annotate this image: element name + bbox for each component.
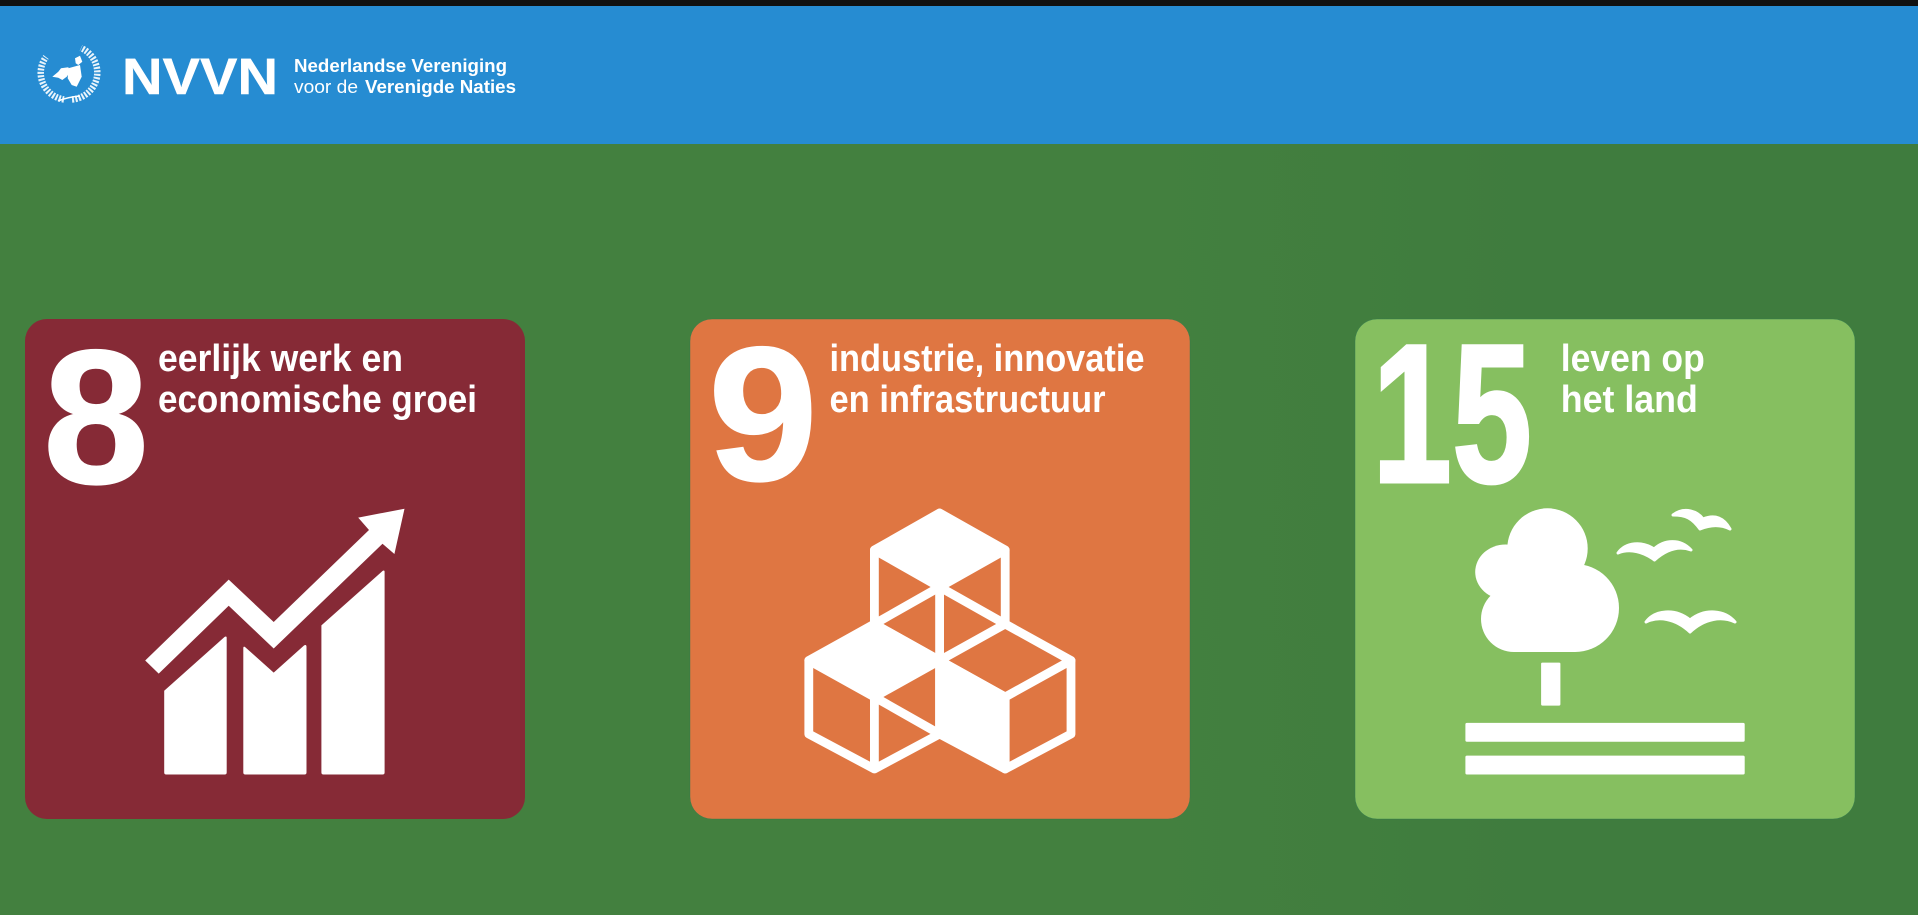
logo tagline: Nederlandse Vereniging [294, 55, 507, 76]
logo tagline [294, 55, 516, 97]
goal title 15: het land [1561, 379, 1698, 421]
icon: stacked cubes [809, 513, 1071, 769]
goal title 15: leven op [1561, 338, 1705, 380]
logo tagline: Verenigde Naties [365, 76, 516, 97]
goal title 8: economische groei [158, 379, 477, 421]
goal number 8: 8 [43, 311, 149, 524]
goal title 9: industrie, innovatie [830, 338, 1144, 380]
goal title 15 [1561, 338, 1705, 421]
goal title 9 [830, 338, 1144, 421]
header band [0, 6, 1918, 144]
icon: rising bar chart with arrow [145, 509, 404, 774]
goal title 8 [158, 338, 477, 421]
icon: tree with birds and ground [1465, 508, 1745, 774]
panel: SDG 8 [25, 311, 525, 819]
logo tagline: voor de [294, 76, 358, 97]
icon: UN emblem logo [41, 48, 97, 101]
logo wordmark: NVVN [122, 48, 278, 105]
goal number 15: 15 [1372, 303, 1532, 524]
panel: SDG 9 [690, 308, 1190, 819]
panel: SDG 15 [1355, 303, 1855, 819]
goal title 8: eerlijk werk en [158, 338, 403, 380]
goal number 9: 9 [708, 308, 818, 521]
goal title 9: en infrastructuur [830, 379, 1106, 421]
